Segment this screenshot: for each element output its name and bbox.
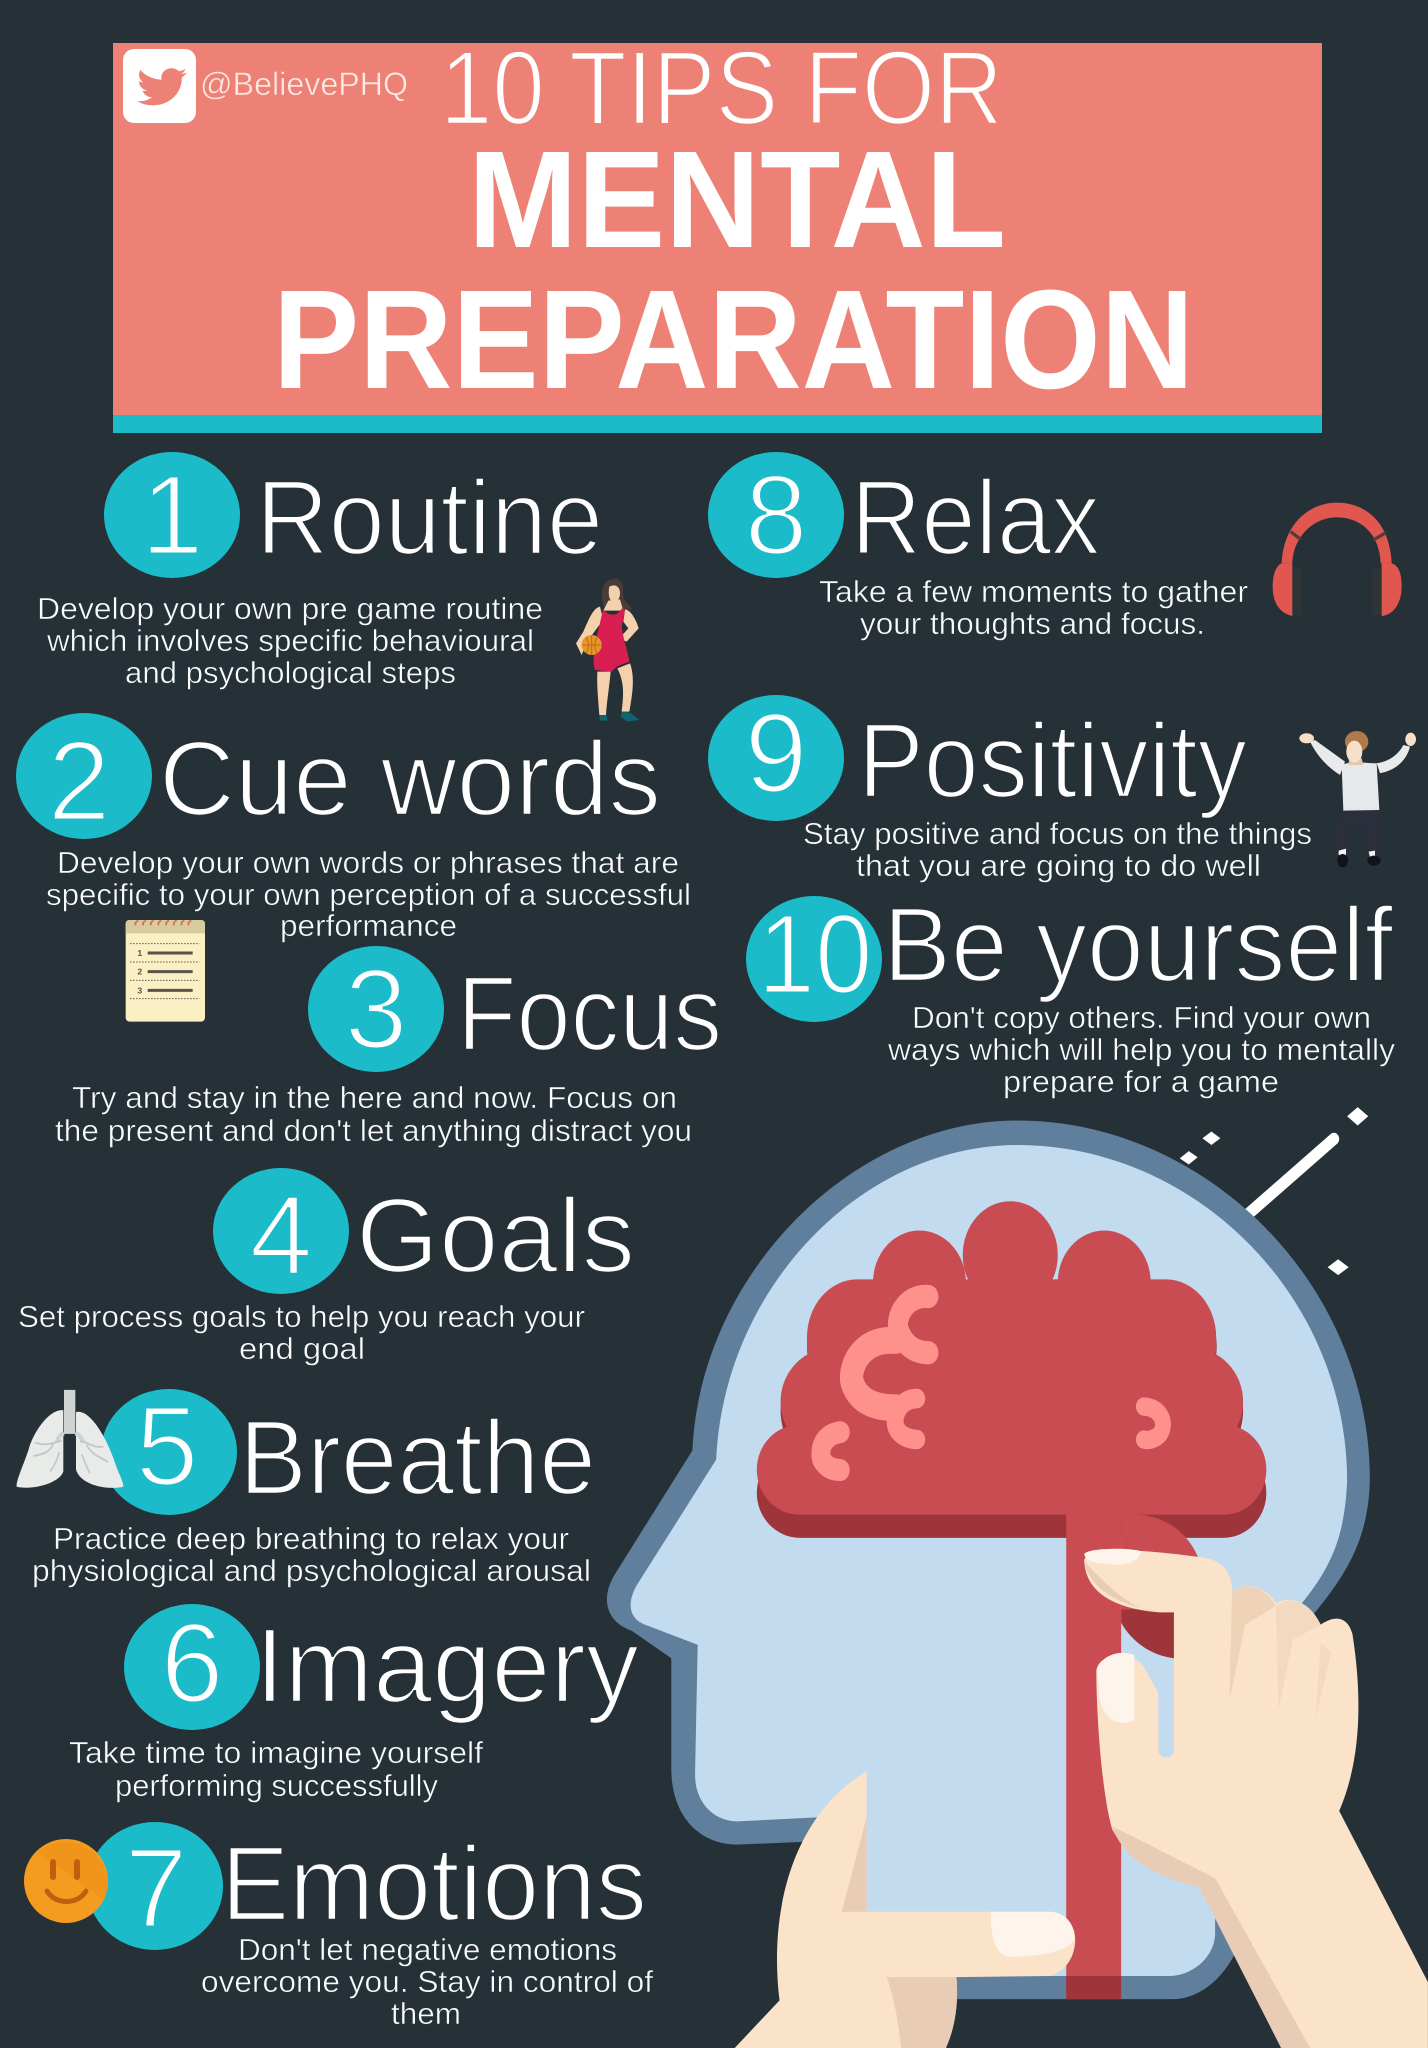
- panel: tip 10 be yourself: ways which will help you to mentally: [887, 1032, 1395, 1067]
- panel: tip 1 routine: Routine: [256, 459, 603, 577]
- panel: tip 1 routine: which involves specific behavioural: [46, 623, 534, 658]
- panel: tip 4 goals: Goals: [356, 1177, 635, 1295]
- icon: notepad: 2: [137, 967, 142, 977]
- panel: tip 5 breathe: physiological and psychological arousal: [32, 1553, 591, 1588]
- panel: tip 5 breathe: Practice deep breathing to relax your: [53, 1521, 569, 1556]
- panel: tip 5 breathe: Breathe: [239, 1399, 596, 1517]
- title line 2: MENTAL: [468, 123, 1006, 277]
- panel: tip 9 positivity: that you are going to do well: [856, 848, 1261, 883]
- panel: tip 2 cue words: [16, 713, 691, 943]
- panel: tip 2 cue words: specific to your own perception of a successful: [46, 877, 691, 912]
- panel: tip 6 imagery: 6: [161, 1600, 223, 1726]
- panel: tip 3 focus: Focus: [457, 955, 722, 1073]
- panel: tip 9 positivity: Stay positive and focus on the things: [803, 816, 1312, 851]
- panel: tip 3 focus: 3: [345, 946, 407, 1072]
- panel: tip 4 goals: end goal: [239, 1331, 365, 1366]
- panel: tip 8 relax: 8: [745, 452, 807, 578]
- panel: tip 10 be yourself: Don't copy others. Find your own: [912, 1000, 1371, 1035]
- panel: tip 3 focus: the present and don't let anything distract you: [55, 1113, 692, 1148]
- icon: notepad: 3: [137, 985, 142, 995]
- panel: tip 2 cue words: performance: [280, 908, 457, 943]
- panel: tip 2 cue words: Develop your own words or phrases that are: [57, 845, 679, 880]
- panel: tip 7 emotions: overcome you. Stay in control of: [201, 1964, 653, 1999]
- panel: tip 9 positivity: [708, 690, 1312, 883]
- panel: tip 8 relax: Take a few moments to gather: [819, 574, 1248, 609]
- panel: tip 3 focus: Try and stay in the here and now. Focus on: [72, 1080, 677, 1115]
- panel: tip 4 goals: Set process goals to help you reach your: [18, 1299, 585, 1334]
- panel: tip 8 relax: [708, 452, 1248, 641]
- illustration: head with brain and hands: [607, 1107, 1428, 2048]
- panel: tip 7 emotions: [87, 1822, 653, 2031]
- icon: basketball player: [576, 578, 639, 722]
- head silhouette: [607, 1121, 1370, 1999]
- panel: tip 10 be yourself: [746, 886, 1395, 1099]
- title line 3: PREPARATION: [273, 260, 1194, 418]
- panel: tip 5 breathe: [32, 1383, 596, 1588]
- panel: tip 2 cue words: Cue words: [159, 720, 661, 838]
- icon: cheering person: [1299, 731, 1416, 867]
- panel: tip 9 positivity: 9: [745, 690, 807, 816]
- panel: tip 7 emotions: Don't let negative emotions: [238, 1932, 617, 1967]
- panel: tip 10 be yourself: prepare for a game: [1003, 1064, 1279, 1099]
- icon: notepad: [126, 920, 205, 1022]
- panel: tip 4 goals: [18, 1168, 635, 1366]
- panel: tip 7 emotions: 7: [125, 1825, 187, 1951]
- icon: twitter: [123, 49, 196, 123]
- icon: sparkle lines: [1180, 1107, 1368, 1275]
- title line 1: 10 TIPS FOR: [440, 30, 1003, 147]
- icon: smiley: [24, 1839, 108, 1923]
- panel: tip 8 relax: Relax: [851, 459, 1100, 577]
- panel: tip 6 imagery: Imagery: [255, 1607, 639, 1725]
- panel: tip 7 emotions: them: [391, 1996, 461, 2031]
- icon: headphones: [1273, 503, 1402, 616]
- panel: tip 5 breathe: 5: [136, 1383, 198, 1509]
- panel: tip 6 imagery: Take time to imagine yourself: [69, 1735, 483, 1770]
- panel: tip 1 routine: [37, 452, 603, 690]
- panel: tip 7 emotions: Emotions: [221, 1825, 647, 1943]
- panel: tip 2 cue words: 2: [48, 718, 110, 844]
- panel: tip 10 be yourself: 10: [758, 891, 872, 1017]
- panel: tip 3 focus: [55, 946, 722, 1148]
- panel: tip 1 routine: 1: [141, 452, 203, 578]
- brain folds: [821, 1296, 1163, 1470]
- panel: tip 10 be yourself: Be yourself: [883, 886, 1394, 1004]
- twitter handle: @BelievePHQ: [200, 66, 408, 102]
- panel: tip 9 positivity: Positivity: [858, 702, 1247, 820]
- panel: tip 4 goals: 4: [250, 1172, 312, 1298]
- panel: tip 6 imagery: performing successfully: [115, 1768, 438, 1803]
- brain: [757, 1201, 1266, 1999]
- panel: tip 1 routine: and psychological steps: [125, 655, 456, 690]
- icon: notepad: 1: [137, 948, 142, 958]
- right hand: [1084, 1549, 1428, 2048]
- panel: tip 6 imagery: [69, 1600, 639, 1803]
- panel: tip 8 relax: your thoughts and focus.: [860, 606, 1205, 641]
- title banner: [113, 30, 1322, 433]
- icon: lungs: [17, 1390, 123, 1488]
- left hand: [735, 1771, 1075, 2048]
- panel: tip 1 routine: Develop your own pre game routine: [37, 591, 543, 626]
